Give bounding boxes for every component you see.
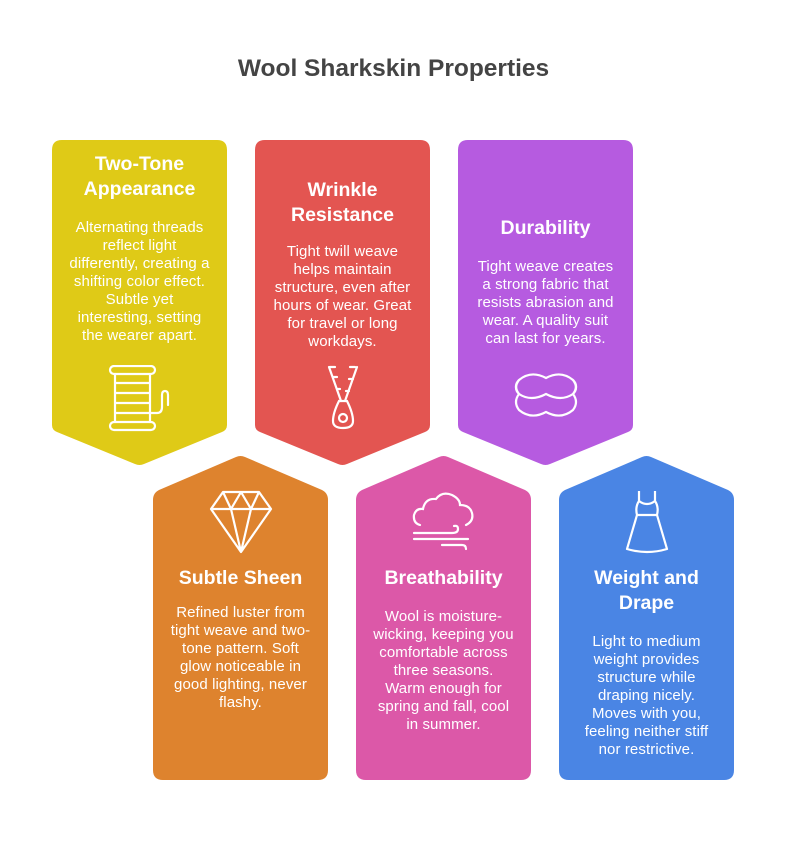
icon: cloud with wind — [412, 492, 474, 550]
heading: Wrinkle — [307, 179, 378, 201]
heading: Weight and — [594, 567, 699, 589]
heading: Breathability — [384, 567, 503, 589]
text: a strong fabric that — [482, 276, 609, 293]
icon: thread spool — [108, 365, 170, 432]
panel: durability — [458, 140, 633, 465]
text — [69, 219, 210, 344]
text: Tight weave creates — [478, 258, 613, 275]
heading: Appearance — [84, 178, 195, 200]
heading — [84, 153, 195, 200]
panel: weight and drape — [559, 456, 734, 780]
icon: dress — [626, 491, 668, 554]
text: Light to medium — [592, 633, 701, 650]
text: feeling neither stiff — [585, 723, 708, 740]
text: draping nicely. — [598, 687, 695, 704]
heading: Resistance — [291, 204, 394, 226]
heading — [291, 179, 394, 226]
text — [477, 258, 614, 347]
text: Moves with you, — [592, 705, 701, 722]
heading: Two-Tone — [95, 153, 184, 175]
text: wear. A quality suit — [483, 312, 608, 329]
heading: Drape — [619, 592, 674, 614]
text: tone pattern. Soft — [182, 640, 299, 657]
text: Subtle yet — [106, 291, 173, 308]
text: interesting, setting — [78, 309, 201, 326]
text — [584, 633, 708, 758]
text — [170, 604, 310, 711]
text: the wearer apart. — [82, 327, 197, 344]
heading: Subtle Sheen — [179, 567, 302, 589]
text: flashy. — [219, 694, 262, 711]
text: Tight twill weave — [287, 243, 398, 260]
text: wicking, keeping you — [373, 626, 514, 643]
text: resists abrasion and — [477, 294, 614, 311]
text — [274, 243, 412, 350]
panel: breathability — [356, 456, 531, 780]
text: for travel or long — [287, 315, 398, 332]
text — [373, 608, 514, 733]
text: structure, even after — [275, 279, 410, 296]
text: workdays. — [308, 333, 377, 350]
text: Warm enough for — [385, 680, 502, 697]
text: tight weave and two- — [171, 622, 310, 639]
panel: two-tone appearance — [52, 140, 227, 465]
text: nor restrictive. — [599, 741, 694, 758]
text: differently, creating a — [69, 255, 210, 272]
text: Refined luster from — [176, 604, 305, 621]
text: reflect light — [103, 237, 176, 254]
heading — [594, 567, 699, 614]
text: three seasons. — [394, 662, 493, 679]
icon: diamond — [210, 490, 272, 554]
text: comfortable across — [379, 644, 508, 661]
icon: zipper — [328, 366, 358, 430]
text: good lighting, never — [174, 676, 307, 693]
text: shifting color effect. — [74, 273, 205, 290]
panel: wrinkle resistance — [255, 140, 430, 465]
text: spring and fall, cool — [378, 698, 509, 715]
icon: fabric band — [514, 373, 578, 417]
text: structure while — [597, 669, 696, 686]
text: helps maintain — [293, 261, 392, 278]
text: Wool is moisture- — [385, 608, 502, 625]
title: Wool Sharkskin Properties — [238, 55, 549, 82]
text: hours of wear. Great — [274, 297, 411, 314]
text: glow noticeable in — [180, 658, 301, 675]
text: Alternating threads — [76, 219, 203, 236]
text: weight provides — [594, 651, 699, 668]
text: in summer. — [406, 716, 481, 733]
panel: subtle sheen — [153, 456, 328, 780]
text: can last for years. — [485, 330, 606, 347]
heading: Durability — [501, 217, 590, 239]
